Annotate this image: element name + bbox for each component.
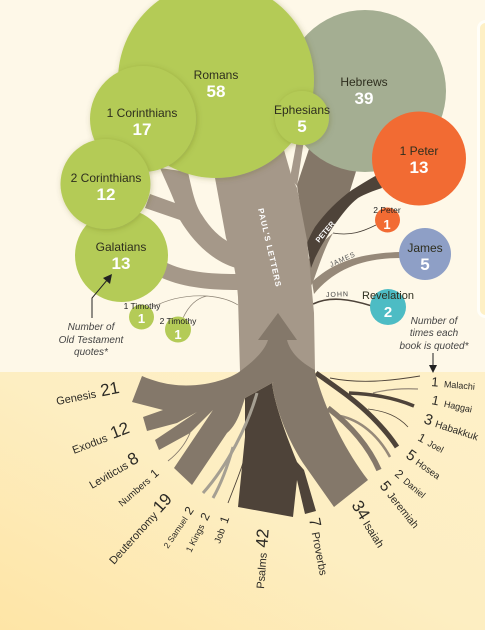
- root: Haggai: [349, 393, 414, 406]
- branch: John: [313, 299, 372, 306]
- bubble: 1 Corinthians: [90, 66, 196, 172]
- bubble: 1 Corinthians: 17: [133, 120, 151, 139]
- bubble: Galatians: [75, 209, 168, 302]
- bubble: 2 Timothy: 2 Timothy: [160, 316, 197, 326]
- label: Deuteronomy: Deuteronomy 19: [103, 490, 176, 568]
- bubble: 2 Peter: 2 Peter: [373, 205, 401, 215]
- branch: Ephesians: [290, 140, 304, 186]
- branch: 1 and 2 Corinthians: [145, 168, 236, 268]
- bubble: Galatians: Galatians: [96, 240, 146, 254]
- label: Genesis: Genesis 21: [54, 378, 121, 409]
- note: Old Testament quotes: [59, 322, 125, 358]
- branch: Hebrews: [297, 146, 358, 248]
- note: times quoted: book is quoted*: [400, 341, 470, 352]
- root: Joel: [368, 409, 408, 427]
- bubble: 1 Corinthians: 1 Corinthians: [107, 106, 177, 120]
- branch lines: Timothy: [153, 296, 238, 318]
- bubble: 1 Peter: 13: [410, 158, 428, 177]
- root: Jeremiah: [328, 408, 379, 470]
- bubble: 2 Peter: [373, 205, 401, 232]
- root: Job: [228, 463, 243, 503]
- branch label: Paul's letters: PAUL'S LETTERS: [256, 207, 283, 288]
- root: 2 Samuel: [203, 393, 257, 493]
- bubble: Revelation: Revelation: [362, 290, 414, 302]
- note: times quoted: [400, 316, 470, 352]
- label: Joel: 1 Joel: [416, 430, 447, 456]
- root: Daniel: [340, 416, 390, 457]
- branch: Galatians: [162, 262, 238, 290]
- branch label: Peter: PETER: [314, 219, 337, 244]
- bubble: 2 Corinthians: 2 Corinthians: [71, 171, 141, 185]
- note: Old Testament quotes: Old Testament: [59, 335, 125, 346]
- bubble: 2 Corinthians: [60, 139, 150, 229]
- side panel: [478, 22, 485, 316]
- label: Jeremiah: 5 Jeremiah: [376, 478, 424, 532]
- sky background: [0, 0, 485, 372]
- label: 2 Samuel: 2 Samuel 2: [159, 504, 197, 551]
- label: Malachi: 1 Malachi: [431, 374, 476, 393]
- bubble: 1 Timothy: 1 Timothy: [124, 301, 161, 311]
- branch: wedge to 2 Peter: [308, 233, 333, 290]
- note: Old Testament quotes: quotes*: [74, 347, 109, 358]
- branch label: John: JOHN: [326, 291, 349, 299]
- arrow: note to Galatians: [92, 274, 112, 318]
- arrow: note to roots: [429, 353, 437, 373]
- root labels: [54, 374, 482, 589]
- root: Hosea: [316, 373, 397, 447]
- bubble: 2 Peter: 1: [383, 217, 391, 232]
- tree trunk and branches: [145, 140, 400, 372]
- label: Habakkuk: 3 Habakkuk: [422, 411, 482, 445]
- bubble: Hebrews: Hebrews: [340, 75, 388, 89]
- bubble: Romans: [118, 0, 314, 178]
- label: Exodus: Exodus 12: [69, 418, 132, 458]
- main trunk: [215, 150, 315, 372]
- bubble: Romans: 58: [207, 82, 225, 101]
- bubble: 1 Peter: [372, 112, 466, 206]
- soil background: [0, 372, 485, 630]
- bubble: Ephesians: Ephesians: [274, 103, 330, 117]
- label: Daniel: 2 Daniel: [392, 467, 429, 501]
- root: Isaiah and arrow base: [272, 372, 368, 507]
- bubble: 1 Peter: 1 Peter: [400, 144, 438, 158]
- label: Numbers: Numbers 1: [115, 466, 162, 509]
- label: Haggai: 1 Haggai: [430, 392, 474, 416]
- bubble: James: [399, 228, 451, 280]
- label: Leviticus: Leviticus 8: [84, 448, 142, 492]
- bubble: James: 5: [420, 255, 430, 274]
- root: 1 Kings: [213, 447, 233, 498]
- bubbles: [60, 0, 466, 342]
- bubble: Hebrews: 39: [355, 89, 373, 108]
- label: Psalms: Psalms 42: [249, 528, 273, 589]
- branch: 2 Peter line: [333, 225, 376, 234]
- bubble: Revelation: [362, 289, 414, 325]
- label: 1 Kings: 1 Kings 2: [181, 510, 213, 554]
- label: Job: Job 1: [210, 514, 232, 545]
- bubble: James: James: [407, 241, 443, 255]
- branch: James: [312, 252, 400, 294]
- bubble: 2 Corinthians: 12: [97, 185, 115, 204]
- roots: Malachi: [330, 376, 420, 381]
- bubble: Ephesians: 5: [297, 117, 307, 136]
- root: Numbers: [168, 433, 190, 461]
- roots: [132, 313, 420, 517]
- bubble: Romans: Romans: [194, 68, 238, 82]
- note: Old Testament quotes: Number of: [68, 322, 116, 333]
- label: Proverbs: 7 Proverbs: [305, 517, 333, 577]
- bubble: 1 Timothy: [124, 301, 161, 330]
- bubble: Hebrews: [284, 10, 446, 172]
- note: times quoted: Number of: [411, 316, 459, 327]
- bubble: 2 Timothy: [160, 316, 197, 342]
- bubble: Ephesians: [274, 91, 330, 145]
- root: Psalms: [238, 383, 316, 517]
- bubble: Revelation: 2: [384, 304, 392, 321]
- note: times quoted: times each: [410, 328, 459, 339]
- label: Hosea: 5 Hosea: [403, 446, 445, 483]
- bubble: 1 Timothy: 1: [138, 311, 145, 326]
- root: Habakkuk: [373, 389, 418, 393]
- label: Isaiah: 34 Isaiah: [348, 497, 391, 551]
- bubble: Galatians: 13: [112, 254, 130, 273]
- bubble: 2 Timothy: 1: [174, 327, 182, 342]
- arrow and left roots: [132, 313, 315, 485]
- branch: Peter: [307, 175, 382, 268]
- branch label: James: JAMES: [329, 251, 357, 269]
